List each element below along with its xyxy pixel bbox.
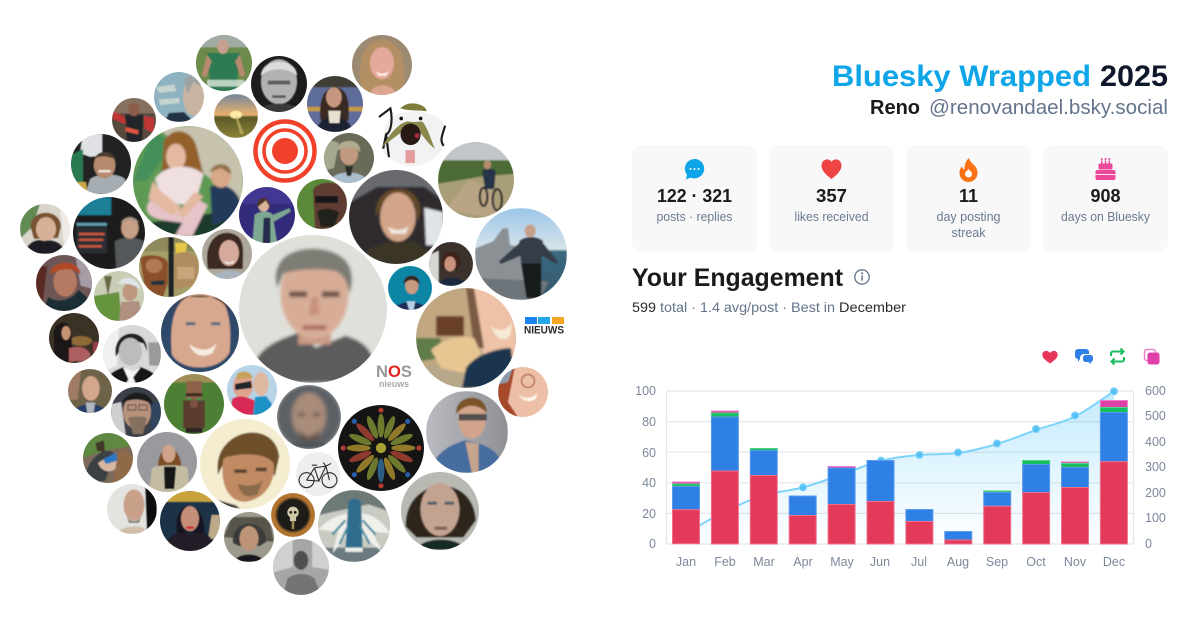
right axis labels: 400 (1145, 435, 1166, 449)
engagement summary: 599 (632, 299, 656, 315)
avatar: man in green shirt (195, 34, 253, 92)
stat card: day posting streak: streak (952, 226, 986, 240)
avatar: black and white woman portrait (102, 324, 162, 384)
avatar: young smiling man (347, 168, 445, 266)
month labels (676, 555, 1125, 569)
stat card: posts and replies: 122 · 321 (657, 186, 732, 206)
bar: Jun (867, 460, 894, 544)
right axis labels: 300 (1145, 460, 1166, 474)
avatar: man in sunglasses and foliage (296, 178, 348, 230)
left axis labels: 60 (642, 446, 656, 460)
avatar: woman and child on grass (131, 124, 245, 238)
avatar: man in blue suit with glasses (426, 391, 508, 473)
left axis labels: 40 (642, 476, 656, 490)
bar: Feb (711, 411, 738, 544)
avatar: man in front of map (153, 71, 205, 123)
stat card: day posting streak: day posting (936, 210, 1001, 224)
avatar: bald man in suit (67, 368, 113, 414)
avatar: woman in khaki jacket (136, 431, 198, 493)
stat card: posts and replies (632, 145, 757, 252)
month labels: May (830, 555, 855, 569)
stat card: days on Bluesky: days on Bluesky (1061, 210, 1151, 224)
avatar: blue fantasy lady (317, 489, 391, 563)
icon: heart (822, 159, 842, 179)
avatar: man on teal background (387, 265, 433, 311)
avatar: woman smiling with cat (414, 286, 518, 390)
avatar: stained glass rose window (336, 403, 426, 493)
engagement summary: December (839, 299, 906, 315)
stat card: day posting streak: 11 (959, 186, 978, 206)
avatar: bicycle drawing (295, 451, 341, 497)
combo chart: monthly engagement (635, 384, 1166, 569)
avatar: man in front of screens (72, 196, 146, 270)
icon: reposts (1111, 348, 1124, 364)
month labels: Nov (1064, 555, 1087, 569)
avatar: RTL Nieuws logo: NIEUWS (524, 324, 564, 336)
avatar: RTL Nieuws logo (524, 317, 564, 336)
bar: Jan (672, 482, 700, 544)
right axis labels (1145, 384, 1166, 551)
avatar: woman in parliament seats (306, 75, 364, 133)
avatar: older man in cap (93, 270, 145, 322)
avatar: cyclist on trail (436, 140, 516, 220)
user name and handle: Reno (870, 97, 920, 119)
month labels: Mar (753, 555, 775, 569)
month labels: Aug (947, 555, 969, 569)
month labels: Feb (714, 555, 736, 569)
avatar: grey man photo (272, 538, 330, 596)
avatar: curly grey hair man (223, 511, 275, 563)
month labels: Jul (911, 555, 927, 569)
avatar: man with brown hair on cream background (198, 417, 292, 511)
bar: Jul (906, 510, 933, 544)
bar: Dec (1100, 400, 1127, 544)
stacked bars (672, 400, 1127, 544)
avatar: skull badge (271, 493, 315, 537)
avatar: woman speaking on stage (238, 186, 296, 244)
heading: Your Engagement: Your Engagement (632, 264, 844, 292)
user name and handle: @renovandael.bsky.social (929, 97, 1168, 119)
avatar: couple selfie with sunglasses (226, 364, 278, 416)
left axis labels: 80 (642, 415, 656, 429)
avatar: cartoon dog with moustache (378, 103, 446, 166)
engagement summary (632, 299, 906, 315)
avatar: close up smiling man (159, 292, 241, 374)
avatar: woman with round glasses (497, 366, 549, 418)
avatar: NOS nieuws logo: NOS (376, 363, 412, 381)
stat card: days on Bluesky: 908 (1090, 186, 1120, 206)
bar: Apr (789, 496, 816, 544)
month labels: Oct (1026, 555, 1046, 569)
stat card: likes received: 357 (816, 186, 847, 206)
avatar cluster (19, 34, 567, 596)
left axis labels: 100 (635, 384, 656, 398)
icon: info (855, 270, 869, 284)
avatar: older man black and white (250, 55, 308, 113)
stat card: posts and replies: posts · replies (656, 210, 732, 224)
month labels: Jan (676, 555, 696, 569)
right axis labels: 600 (1145, 384, 1166, 398)
avatar: sunset field (214, 94, 258, 138)
avatar: runner with red sleeves (111, 97, 157, 143)
avatar: NOS nieuws logo: nieuws (379, 379, 409, 390)
bar: Aug (945, 532, 972, 544)
icon: birthday cake (1096, 158, 1116, 180)
avatar: smiling man in bus (70, 133, 132, 195)
icon: replies (1075, 349, 1093, 364)
icon: quotes (1144, 350, 1160, 364)
month labels: Sep (986, 555, 1008, 569)
avatar: girl in restaurant (48, 312, 100, 364)
icon: likes (1042, 351, 1058, 364)
avatar: blonde woman (351, 34, 413, 96)
right axis labels: 200 (1145, 486, 1166, 500)
month labels: Jun (870, 555, 890, 569)
title: Bluesky Wrapped (832, 60, 1091, 93)
stat card: likes received (769, 145, 894, 252)
right axis labels: 500 (1145, 409, 1166, 423)
avatar: minecraft villager (163, 373, 225, 435)
avatar: man with long dark hair (399, 470, 481, 552)
avatar: two dogs behind fence (138, 236, 200, 298)
avatar: woman with red lips and blue background (159, 490, 221, 552)
bar: May (828, 466, 855, 544)
avatar: main profile man in grey sweater (236, 232, 390, 386)
avatar: red haired man (35, 254, 93, 312)
avatar: cat and person with blue sunglasses (82, 432, 134, 484)
avatar: NOS nieuws logo (376, 363, 412, 390)
avatar: woman with short brown hair (19, 203, 71, 255)
engagement summary: total · 1.4 avg/post · Best in (660, 299, 835, 315)
bar: Mar (750, 448, 777, 544)
area under cumulative line (686, 391, 1114, 544)
stat card: days on Bluesky (1043, 145, 1168, 252)
bar: Oct (1023, 460, 1050, 544)
month labels: Dec (1103, 555, 1125, 569)
avatar: bearded man with glasses (110, 386, 162, 438)
avatar: bald man with grey beard (106, 483, 158, 535)
avatar: older man with denim jacket (323, 132, 375, 184)
title: 2025 (1100, 60, 1168, 93)
icon: speech bubble (685, 159, 704, 179)
month labels: Apr (793, 555, 813, 569)
right axis labels: 0 (1145, 537, 1152, 551)
legend icons (1042, 348, 1160, 364)
stat card: likes received: likes received (794, 210, 869, 224)
avatar: red target rings (256, 122, 314, 180)
avatar: woman with long dark hair (201, 228, 253, 280)
bar: Nov (1062, 462, 1088, 544)
stat card: day posting streak (906, 145, 1031, 252)
left axis labels (635, 384, 656, 551)
avatar: man on navy ship (475, 208, 567, 300)
right axis labels: 100 (1145, 511, 1166, 525)
bar: Sep (984, 491, 1011, 544)
icon: flame (960, 158, 978, 182)
left axis labels: 0 (649, 537, 656, 551)
avatar: blurred bald man (276, 384, 342, 450)
left axis labels: 20 (642, 507, 656, 521)
cumulative line (686, 391, 1114, 534)
avatar: woman with red lips, dark (428, 241, 474, 287)
line points (800, 388, 1118, 491)
